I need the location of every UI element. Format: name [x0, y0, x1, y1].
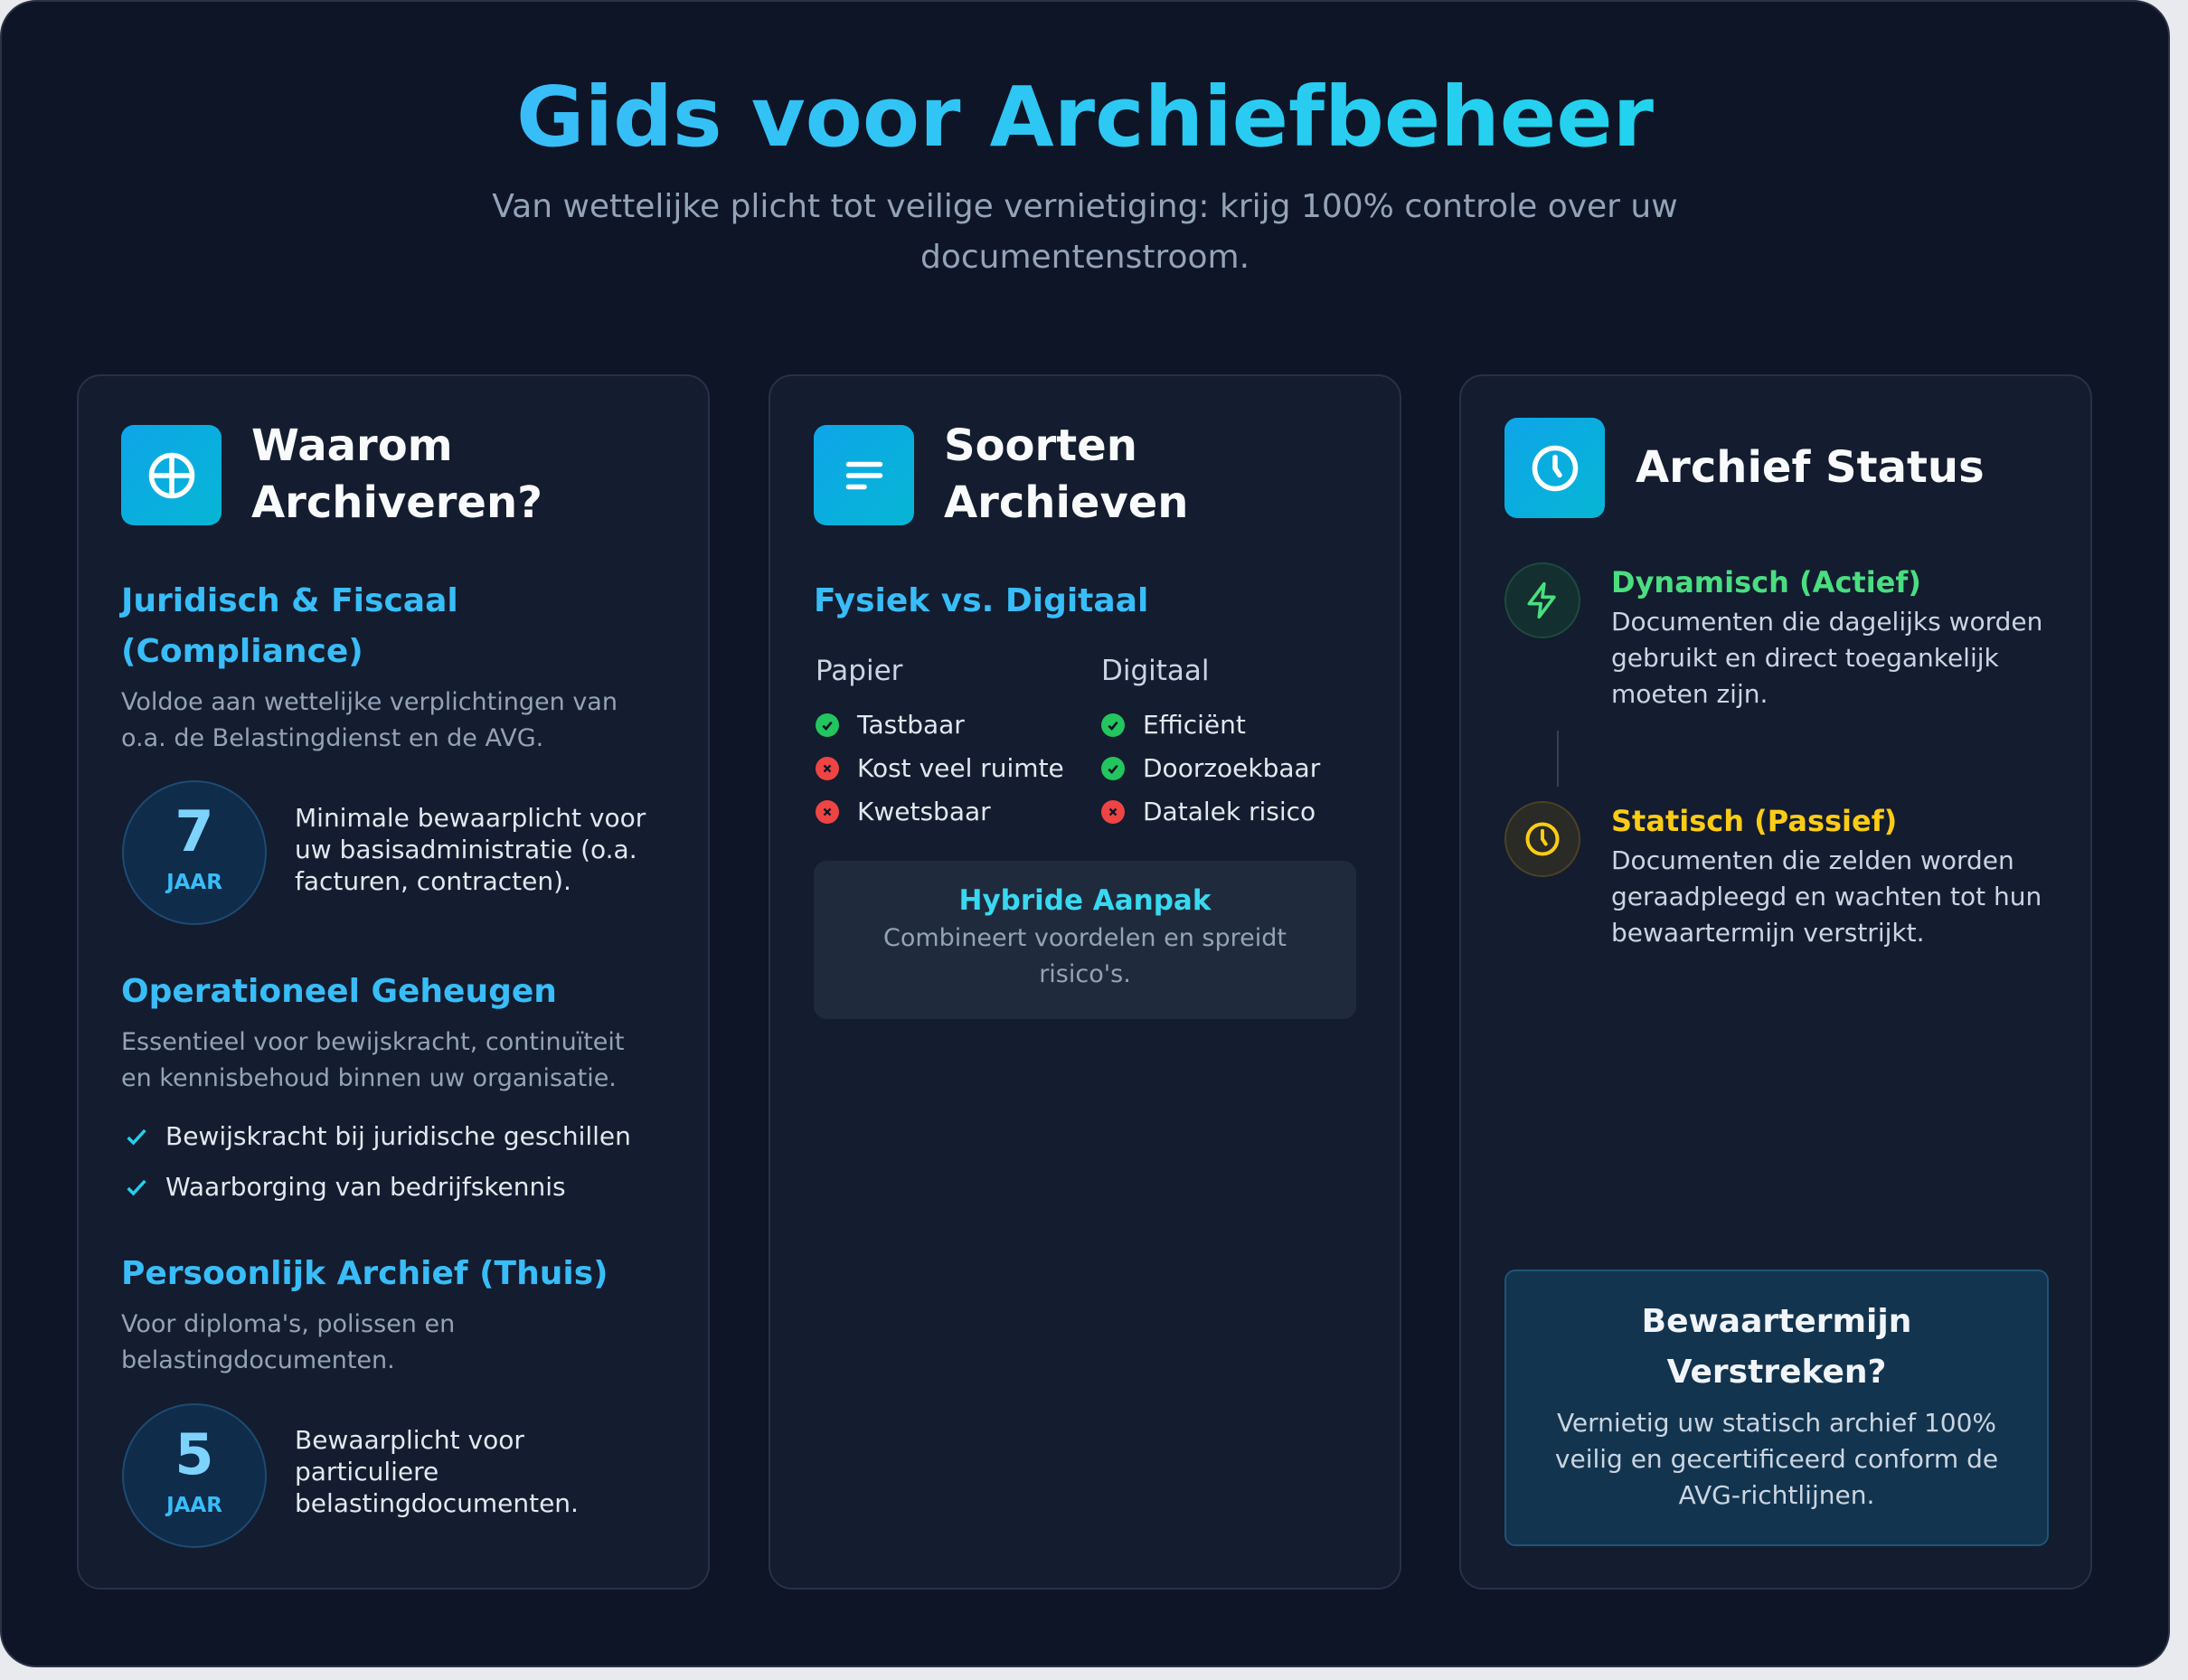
stat: 7 jaar: 7 — [174, 798, 214, 864]
column: papier: Kost veel ruimte — [857, 753, 1064, 783]
callout: hybride aanpak: risico's. — [1039, 960, 1131, 988]
section: fysiek vs digitaal: Fysiek vs. Digitaal — [814, 582, 1148, 619]
item: dynamisch: Dynamisch (Actief) — [1611, 565, 1921, 599]
callout: bewaartermijn verstreken: Bewaartermijn — [1642, 1303, 1911, 1340]
item: statisch: bewaartermijn verstrijkt. — [1611, 918, 1924, 948]
icon: crosshair — [121, 425, 222, 525]
icon: lightning — [1504, 562, 1580, 638]
panel: waarom archiveren — [77, 374, 710, 1590]
stat: 7 jaar — [122, 780, 267, 925]
text: operationeel — [121, 1028, 624, 1092]
stat text — [295, 803, 646, 896]
column: papier: Papier — [816, 655, 902, 687]
icon: lines — [814, 425, 914, 525]
stat text: uw basisadministratie (o.a. — [295, 835, 637, 864]
heading: Archieven — [944, 477, 1188, 528]
item: statisch: Documenten die zelden worden — [1611, 845, 2014, 875]
callout: hybride aanpak — [814, 861, 1356, 1019]
panel: soorten archieven — [769, 374, 1401, 1590]
column: papier — [816, 655, 1064, 826]
text: persoonlijk: Voor diploma's, polissen en — [121, 1310, 455, 1338]
section: juridisch — [119, 582, 458, 670]
text: operationeel: Essentieel voor bewijskracht, continuïteit — [121, 1028, 624, 1056]
text: juridisch: o.a. de Belastingdienst en de AVG. — [121, 724, 543, 752]
heading — [944, 420, 1188, 528]
subtitle: Van wettelijke plicht tot veilige vernietiging: krijg 100% controle over uw — [492, 188, 1678, 225]
item: dynamisch: gebruikt en direct toegankelijk — [1611, 643, 1999, 673]
icon: clock — [1504, 418, 1605, 518]
stat text: facturen, contracten). — [295, 866, 571, 896]
connector line — [1557, 731, 1559, 787]
text: juridisch — [121, 688, 618, 752]
stat text: Bewaarplicht voor — [295, 1425, 524, 1455]
checklist: Waarborging van bedrijfskennis — [165, 1172, 566, 1202]
heading: Archiveren? — [251, 477, 542, 528]
heading — [251, 420, 542, 528]
callout: bewaartermijn verstreken: Verstreken? — [1667, 1354, 1886, 1391]
item: dynamisch — [1504, 562, 2042, 709]
item: dynamisch: moeten zijn. — [1611, 679, 1768, 709]
heading: Waarom — [251, 420, 453, 471]
callout: hybride aanpak: Hybride Aanpak — [958, 884, 1211, 917]
column: papier: Kwetsbaar — [857, 797, 991, 826]
callout: hybride aanpak: Combineert voordelen en spreidt — [883, 924, 1287, 952]
section: juridisch: (Compliance) — [121, 633, 363, 670]
section: juridisch: Juridisch & Fiscaal — [121, 582, 458, 619]
callout: bewaartermijn verstreken: veilig en gecertificeerd conform de — [1555, 1444, 1998, 1474]
item: statisch: Statisch (Passief) — [1611, 804, 1897, 838]
stat text — [295, 1425, 579, 1518]
section: persoonlijk: Persoonlijk Archief (Thuis) — [121, 1255, 608, 1292]
stat: 5 jaar: 5 — [174, 1421, 214, 1487]
item: dynamisch: Documenten die dagelijks worden — [1611, 607, 2042, 637]
subtitle: documentenstroom. — [920, 239, 1250, 276]
column: papier: Tastbaar — [857, 710, 965, 740]
item: statisch — [1504, 801, 2042, 948]
stat: 7 jaar: JAAR — [166, 871, 222, 894]
column: digitaal: Efficiënt — [1143, 710, 1246, 740]
text: juridisch: Voldoe aan wettelijke verplichtingen van — [121, 688, 618, 716]
stat text: belastingdocumenten. — [295, 1488, 579, 1518]
column: digitaal: Digitaal — [1101, 655, 1210, 687]
item: statisch: geraadpleegd en wachten tot hun — [1611, 882, 2042, 911]
checklist — [127, 1121, 631, 1202]
subtitle — [492, 188, 1678, 276]
stat: 5 jaar — [122, 1403, 267, 1548]
stat text: Minimale bewaarplicht voor — [295, 803, 646, 833]
column: digitaal: Doorzoekbaar — [1143, 753, 1320, 783]
callout: bewaartermijn verstreken: Vernietig uw statisch archief 100% — [1557, 1408, 1996, 1438]
title: Gids voor Archiefbeheer — [516, 69, 1654, 165]
callout: bewaartermijn verstreken: AVG-richtlijnen. — [1679, 1480, 1874, 1510]
callout: bewaartermijn verstreken — [1504, 1269, 2049, 1546]
text: persoonlijk — [121, 1310, 455, 1374]
heading: Soorten — [944, 420, 1137, 471]
checklist: Bewijskracht bij juridische geschillen — [165, 1121, 631, 1151]
section: operationeel: Operationeel Geheugen — [121, 973, 557, 1010]
icon: clock — [1504, 801, 1580, 877]
stat: 5 jaar: JAAR — [166, 1494, 222, 1517]
column: digitaal: Datalek risico — [1143, 797, 1316, 826]
panel: archief status — [1459, 374, 2092, 1590]
text: operationeel: en kennisbehoud binnen uw organisatie. — [121, 1064, 617, 1092]
text: persoonlijk: belastingdocumenten. — [121, 1346, 395, 1374]
stat text: particuliere — [295, 1457, 439, 1487]
heading: Archief Status — [1636, 442, 1985, 493]
column: digitaal — [1101, 655, 1320, 826]
